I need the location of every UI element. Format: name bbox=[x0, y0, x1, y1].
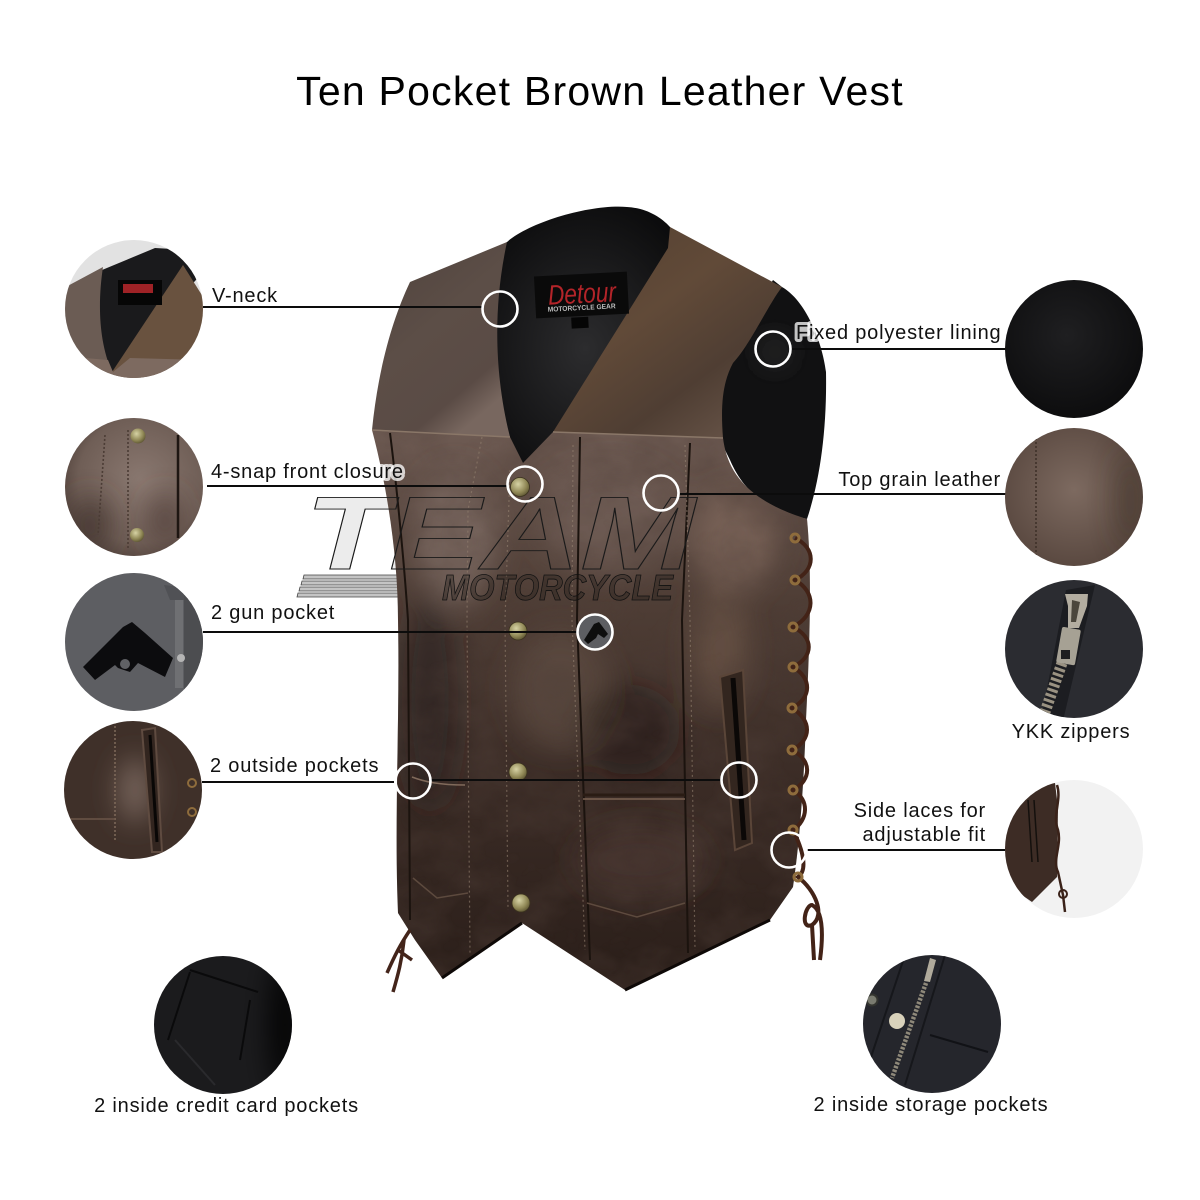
icon: pistol bbox=[83, 622, 173, 680]
callout: fixed polyester lining: Fixed polyester lining bbox=[796, 322, 1001, 344]
feature leader lines bbox=[202, 307, 1006, 850]
watermark logo outline: MOTORCYCLE bbox=[442, 567, 674, 608]
zipper pocket bbox=[720, 670, 752, 850]
callout: v-neck bbox=[60, 240, 278, 380]
callout: 2 outside pockets: 2 outside pockets bbox=[210, 755, 379, 777]
armhole lining bbox=[700, 280, 826, 519]
callout: 4-snap front closure: 4-snap front closure bbox=[211, 461, 404, 483]
callout: 2 gun pocket bbox=[65, 573, 335, 711]
watermark logo outline bbox=[305, 476, 698, 608]
title: Ten Pocket Brown Leather Vest bbox=[296, 68, 904, 114]
vest body bbox=[372, 430, 810, 990]
collar hem bbox=[372, 430, 723, 438]
callout: top grain leather bbox=[838, 428, 1143, 566]
neck lining bbox=[480, 207, 690, 465]
callout: fixed polyester lining bbox=[796, 280, 1143, 418]
callout: side laces: Side laces for bbox=[854, 800, 986, 822]
collar label: MOTORCYCLE GEAR bbox=[548, 303, 616, 314]
callout: side laces: adjustable fit bbox=[862, 824, 986, 846]
gun marker bbox=[578, 615, 612, 649]
snap buttons bbox=[509, 478, 530, 912]
callout: 2 outside pockets bbox=[64, 721, 379, 859]
callout: 2 inside credit card pockets: 2 inside credit card pockets bbox=[94, 1095, 359, 1117]
left collar bbox=[372, 242, 510, 437]
callout: 2 gun pocket: 2 gun pocket bbox=[211, 602, 335, 624]
callout: top grain leather: Top grain leather bbox=[838, 469, 1001, 491]
right collar bbox=[553, 227, 782, 438]
callout: 2 inside storage pockets: 2 inside storage pockets bbox=[814, 1094, 1048, 1116]
watermark logo outline: TEAM bbox=[305, 476, 698, 592]
callout: v-neck: V-neck bbox=[212, 285, 278, 307]
callout: 4-snap front closure bbox=[65, 418, 404, 556]
left lace knot bbox=[387, 930, 412, 992]
callout: side laces bbox=[854, 780, 1143, 918]
feature marker rings bbox=[396, 292, 806, 868]
callout: YKK zippers: YKK zippers bbox=[1012, 721, 1130, 743]
vest illustration bbox=[372, 207, 826, 1000]
panel seams bbox=[390, 433, 690, 960]
collar label bbox=[534, 272, 630, 330]
side laces bbox=[788, 534, 822, 960]
callout: 2 inside storage pockets bbox=[814, 955, 1048, 1116]
callout: 2 inside credit card pockets bbox=[94, 955, 359, 1117]
stitching bbox=[467, 437, 695, 953]
leather highlights and shading bbox=[372, 430, 810, 1000]
watermark background fill: TEAM bbox=[305, 476, 698, 592]
collar label: Detour bbox=[547, 276, 618, 311]
callout: YKK zippers bbox=[1005, 580, 1143, 743]
lower pockets bbox=[412, 777, 770, 990]
